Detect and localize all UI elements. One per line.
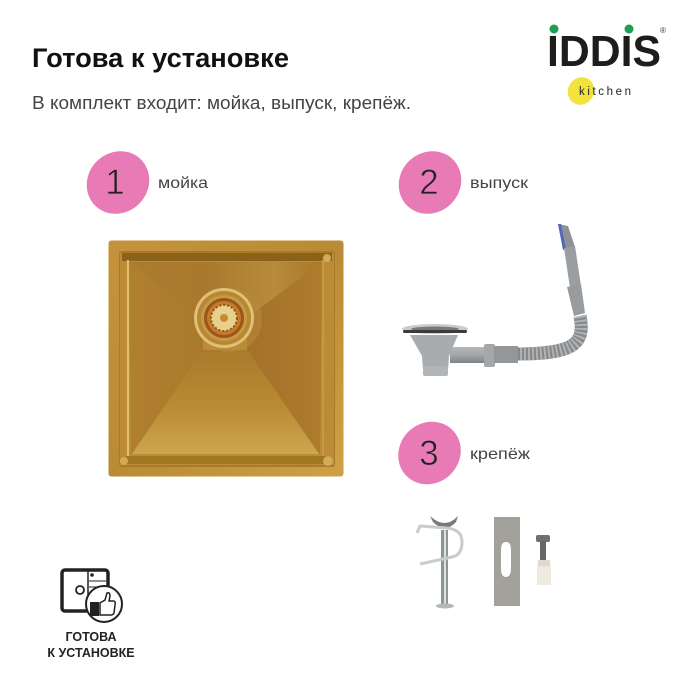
badge number: 1 bbox=[105, 163, 125, 202]
icon sink divider bbox=[87, 571, 89, 610]
basin back facet bbox=[129, 262, 322, 318]
basin front facet bbox=[132, 350, 319, 454]
badge number: 2 bbox=[419, 163, 439, 202]
drain tail bbox=[423, 366, 448, 376]
badge blob bbox=[385, 409, 474, 497]
badge number: 3 bbox=[419, 434, 439, 473]
metal plate bbox=[494, 517, 520, 606]
pipe nuts bbox=[484, 344, 495, 367]
icon drain bbox=[76, 586, 84, 594]
horizontal pipe bbox=[450, 347, 488, 363]
tube coupling bbox=[567, 284, 585, 316]
corrugated hose bbox=[516, 316, 581, 354]
badge 3 bbox=[385, 409, 474, 497]
icon thumb circle bbox=[86, 586, 122, 622]
label: мойка: мойка bbox=[158, 175, 208, 192]
sink flange bbox=[108, 240, 344, 476]
bolt base bbox=[436, 604, 454, 608]
logo yellow blob bbox=[563, 72, 599, 110]
bolt bbox=[417, 516, 462, 608]
sink inner wall bbox=[119, 251, 335, 467]
sink image bbox=[108, 240, 344, 476]
title: Готова к установке bbox=[32, 43, 289, 73]
sink corners bbox=[120, 254, 333, 466]
logo: IDDIS kitchen bbox=[547, 24, 666, 110]
clamp hook bbox=[417, 526, 462, 564]
strainer flange bbox=[402, 324, 468, 334]
overflow head bbox=[558, 224, 575, 249]
badge 1 bbox=[74, 138, 162, 227]
logo kitchen text: kitchen bbox=[579, 86, 631, 98]
icon: ready to install bbox=[62, 570, 122, 622]
subtitle: В комплект входит: мойка, выпуск, крепёж. bbox=[32, 93, 411, 113]
badge 2 bbox=[386, 138, 474, 227]
mounting hardware bbox=[417, 516, 551, 608]
basin left facet bbox=[129, 262, 203, 455]
label: крепёж: крепёж bbox=[470, 446, 530, 463]
registered mark: ® bbox=[660, 26, 666, 35]
icon sink bbox=[62, 570, 108, 611]
badge blob bbox=[74, 138, 162, 227]
screw shaft bbox=[540, 541, 546, 561]
drain fitting bbox=[402, 224, 585, 376]
icon caption bbox=[47, 630, 135, 660]
icon tap bbox=[90, 573, 94, 577]
drain body bbox=[410, 335, 458, 370]
overflow tube bbox=[564, 246, 581, 288]
screw head bbox=[536, 535, 550, 542]
icon thumb cuff bbox=[90, 602, 99, 616]
icon thumb up bbox=[100, 593, 115, 615]
drain bbox=[194, 288, 262, 352]
badge blob bbox=[386, 138, 474, 227]
logo wordmark: IDDIS bbox=[547, 27, 661, 76]
bolt shaft bbox=[441, 530, 448, 606]
screw plug bbox=[537, 565, 551, 585]
clamp wings bbox=[430, 516, 458, 528]
screw bbox=[536, 535, 551, 585]
logo dots bbox=[550, 24, 634, 34]
caption line 1: ГОТОВА bbox=[65, 630, 117, 644]
caption line 2: К УСТАНОВКЕ bbox=[47, 646, 135, 660]
basin right facet bbox=[247, 262, 322, 455]
label: выпуск: выпуск bbox=[470, 175, 529, 192]
